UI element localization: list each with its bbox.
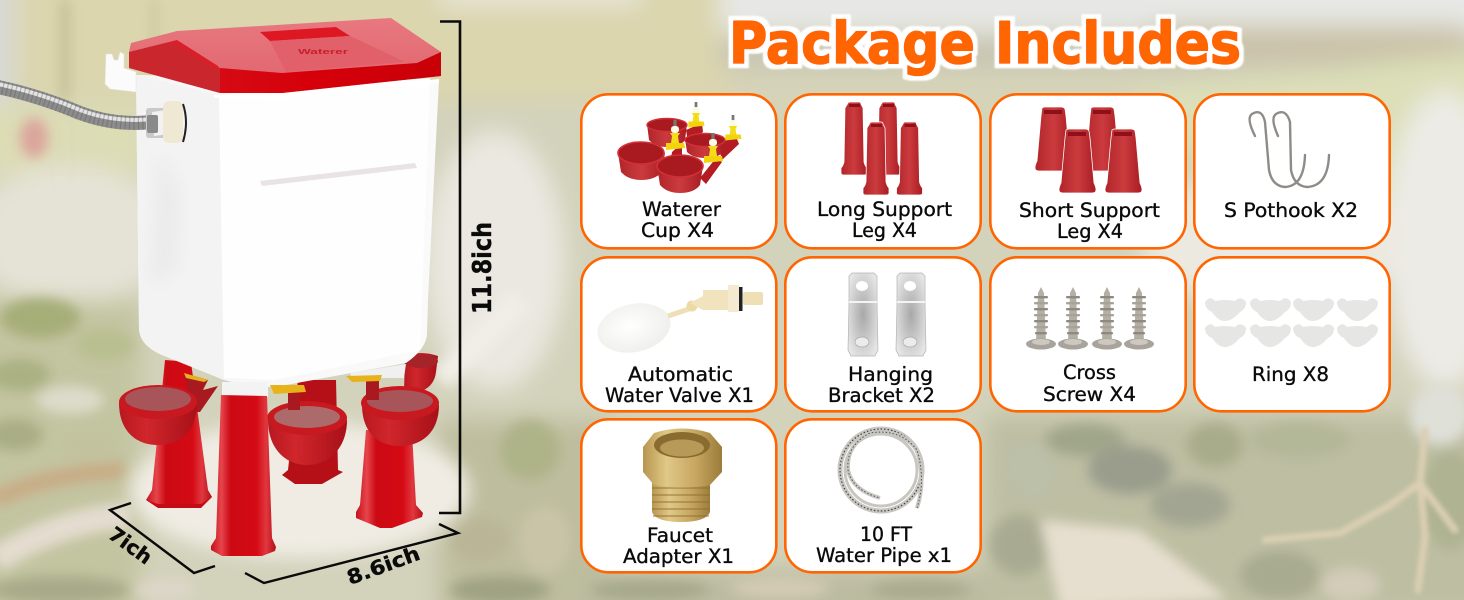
label (1019, 199, 1160, 243)
label: Cup X4 (641, 219, 714, 242)
panel: s pothook (1194, 94, 1390, 248)
label: Water Valve X1 (605, 384, 754, 407)
label: Waterer (642, 198, 722, 221)
product: chicken waterer (0, 18, 441, 556)
label: Long Support (817, 198, 952, 221)
panel: waterer cup (581, 94, 776, 248)
label: Cross (1063, 361, 1116, 384)
dimension: width 8.6ich (245, 524, 458, 590)
label (817, 198, 952, 242)
label: Leg X4 (1057, 220, 1123, 243)
label: Screw X4 (1043, 383, 1136, 406)
back right leg and cup (404, 353, 438, 392)
icon: float valve (593, 285, 763, 359)
label (1043, 361, 1136, 406)
label (623, 524, 734, 568)
panel: cross screw (990, 257, 1186, 411)
label: Bracket X2 (828, 384, 935, 407)
front left cup (119, 373, 218, 445)
front middle cup (267, 385, 347, 465)
label (816, 523, 952, 567)
label: Automatic (628, 363, 733, 386)
label: Faucet (647, 524, 713, 547)
label (605, 363, 754, 407)
label: Water Pipe x1 (816, 544, 952, 567)
label: Leg X4 (852, 219, 917, 242)
label: Hanging (848, 363, 933, 386)
label: S Pothook X2 (1224, 199, 1358, 222)
icon: four short legs (1035, 107, 1142, 193)
steel water pipe (0, 84, 152, 123)
icon: four long legs (841, 102, 922, 195)
title (729, 11, 1241, 77)
pipe fitting (146, 101, 186, 143)
red lid (129, 18, 441, 99)
tank body (136, 75, 439, 397)
icon: eight rings (1205, 298, 1378, 347)
icon: four screws (1026, 287, 1154, 350)
icon: four waterer cups (618, 102, 742, 193)
label (828, 363, 935, 407)
panel: long support leg (785, 94, 981, 248)
back left support leg (146, 360, 212, 508)
white bracket (105, 52, 136, 92)
dimension: height 11.8ich (439, 22, 498, 513)
label: 10 FT (860, 523, 912, 546)
panel: automatic water valve (581, 257, 776, 411)
dimension: width 8.6ich: 8.6ich (344, 541, 423, 590)
ground glow under waterer (130, 422, 470, 558)
label: Ring X8 (1252, 363, 1329, 386)
dimension: depth 7ich: 7ich (104, 522, 157, 569)
label (641, 198, 722, 242)
dimension: depth 7ich (104, 503, 215, 573)
label: Adapter X1 (623, 545, 734, 568)
dimension: height 11.8ich: 11.8ich (468, 222, 498, 314)
icon: coiled steel hose (840, 429, 922, 511)
icon: two metal brackets (848, 273, 926, 356)
front right cup (346, 375, 439, 446)
panel: ring (1194, 257, 1390, 411)
title: Package (729, 11, 975, 77)
back middle support leg (282, 380, 343, 484)
front support leg (211, 395, 276, 556)
icon: two s hooks (1250, 112, 1329, 187)
panel: faucet adapter (581, 419, 776, 572)
red lid: Waterer (298, 49, 349, 56)
title: Includes (995, 11, 1241, 77)
panel: short support leg (990, 94, 1186, 248)
icon: brass adapter (643, 428, 722, 522)
label: Short Support (1019, 199, 1160, 222)
front right support leg (356, 430, 423, 528)
panel: water pipe (785, 419, 981, 572)
panel: hanging bracket (785, 257, 981, 411)
